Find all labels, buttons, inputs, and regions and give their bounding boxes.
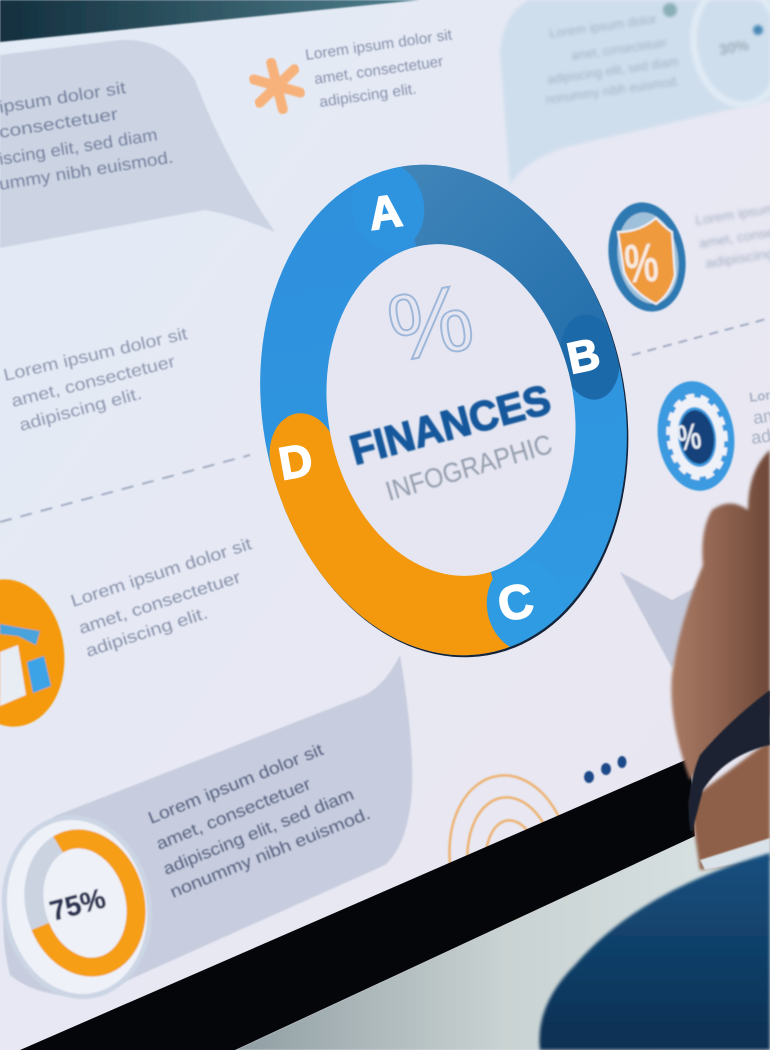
pointer tip of hidden bubble, right (620, 572, 700, 668)
text block: bottom bubble: nonummy nibh euismod. (167, 804, 373, 902)
text block: top left bubble: consectetuer (0, 104, 120, 142)
text block: bottom bubble: amet, consectetuer (153, 774, 314, 854)
text block: middle left: Lorem ipsum dolor sit (2, 324, 189, 385)
divider left (0, 455, 250, 522)
letter A: A (365, 184, 405, 240)
hand and fingers (671, 450, 770, 780)
monitor bezel (20, 758, 695, 1050)
title: finances: FINANCES (345, 375, 555, 474)
chart arrow (0, 624, 40, 645)
text block: lower left: adipiscing elit. (83, 603, 210, 661)
text block: bottom bubble: adipiscing elit, sed diam (160, 785, 357, 879)
text block: shield (694, 201, 770, 271)
forearm (690, 740, 770, 870)
text block: middle left: adipiscing elit. (17, 384, 144, 435)
shirt cuff (700, 838, 770, 870)
donut chart: 75% (0, 806, 164, 1008)
ring centre (301, 224, 601, 596)
text block: shield: adipiscing (704, 245, 770, 271)
progress badge: top right (663, 0, 770, 112)
navigation dots (584, 756, 626, 783)
donut label: 75% (47, 882, 109, 927)
text block: top centre: amet, consectetuer (313, 53, 444, 88)
icon: orange asterisk (251, 58, 303, 114)
text block: top right bubble: amet, consectetuer (570, 35, 668, 63)
icon: gear with percent (651, 376, 741, 496)
letter B: B (563, 329, 604, 384)
text block: lower left (68, 534, 254, 661)
subtitle: infographic: INFOGRAPHIC (382, 428, 556, 507)
text block: bottom bubble: Lorem ipsum dolor sit (145, 740, 326, 828)
cap B (561, 314, 620, 400)
text block: top right bubble: nonummy nibh euismod. (544, 73, 680, 107)
cap A (356, 166, 424, 239)
icon: shield with percent: % (623, 231, 660, 295)
progress badge: top right: 30% (718, 37, 750, 59)
speech bubble: top left (0, 40, 275, 248)
text block: middle left: amet, consectetuer (9, 352, 177, 411)
dark top-left corner behind the screen (0, 0, 420, 42)
cap D (270, 413, 334, 469)
jacket sleeve (539, 853, 770, 1050)
text block: top left bubble: ipsum dolor sit (0, 78, 127, 117)
chart bars (0, 645, 26, 706)
cap C (486, 578, 564, 647)
text block: gear (748, 385, 770, 448)
suit sleeve and hand (539, 450, 770, 1050)
text block: bottom bubble (145, 740, 373, 902)
icon: gear with percent: % (674, 415, 704, 459)
text block: top centre: adipiscing elit. (318, 80, 418, 111)
icon: percent sign: % (380, 264, 481, 382)
text block: top left bubble (0, 78, 174, 194)
text block: top right bubble: adipiscing elit, sed diam (546, 54, 679, 87)
letter C: C (493, 574, 538, 633)
speech bubble: top right, blurred (500, 0, 770, 185)
text block: lower left: amet, consectetuer (76, 567, 243, 638)
icon: shield with percent (600, 196, 694, 318)
segments clipped to ring (270, 164, 620, 656)
text block: top right bubble (544, 11, 680, 107)
text block: top left bubble: ummy nibh euismod. (0, 148, 174, 194)
speech bubble: bottom (3, 655, 412, 996)
text block: lower left: Lorem ipsum dolor sit (68, 534, 254, 611)
watch strap (689, 690, 770, 832)
divider right (632, 318, 770, 355)
icon: orange chart circle (0, 572, 74, 734)
text block: top right bubble: Lorem ipsum dolor (548, 11, 658, 41)
text block: top centre: Lorem ipsum dolor sit (304, 26, 454, 64)
letter D: D (275, 433, 316, 490)
decorative concentric arcs (439, 767, 581, 953)
text block: top left bubble: iscing elit, sed diam (0, 125, 159, 169)
text block: shield: amet, conse (698, 224, 770, 251)
text block: shield: Lorem ipsum (694, 201, 770, 228)
ring base (222, 135, 665, 685)
text block: middle left (2, 324, 189, 435)
text block: top centre (304, 26, 454, 111)
desk behind monitor (235, 800, 770, 1050)
main ring chart (260, 164, 628, 658)
